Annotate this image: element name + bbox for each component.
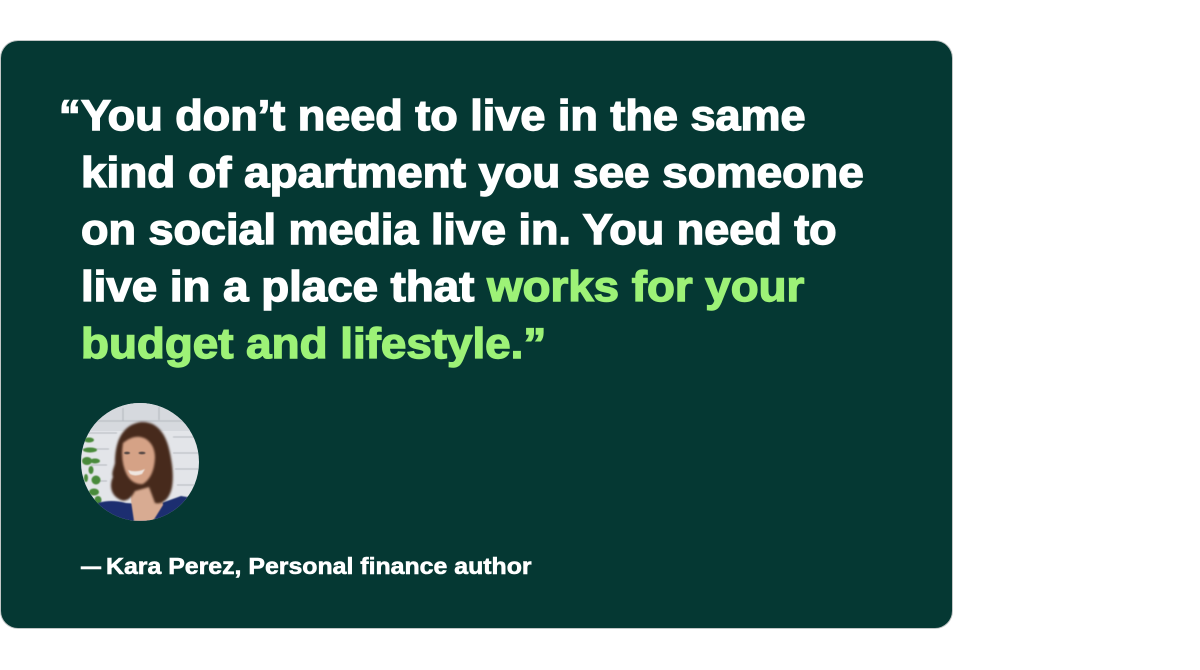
- quote text: You don’t need to live in the same: [81, 92, 806, 140]
- attribution: Kara Perez, Personal finance author: [106, 553, 532, 579]
- quote text: budget and lifestyle.”: [81, 320, 546, 368]
- panel: quote card: [1, 41, 952, 628]
- quote text: [59, 92, 864, 368]
- smile: [128, 469, 145, 476]
- quote text: “: [59, 92, 80, 140]
- portrait photo: Kara Perez: [81, 403, 199, 521]
- neck and chest: [130, 486, 164, 521]
- quote text: live in a place that works for your: [81, 263, 804, 311]
- dress: [98, 495, 188, 521]
- eyes: [124, 452, 130, 454]
- quote text: on social media live in. You need to: [81, 206, 837, 254]
- face: [122, 437, 155, 484]
- attribution: —: [81, 553, 101, 579]
- quote text: kind of apartment you see someone: [81, 149, 864, 197]
- hair: [111, 422, 173, 503]
